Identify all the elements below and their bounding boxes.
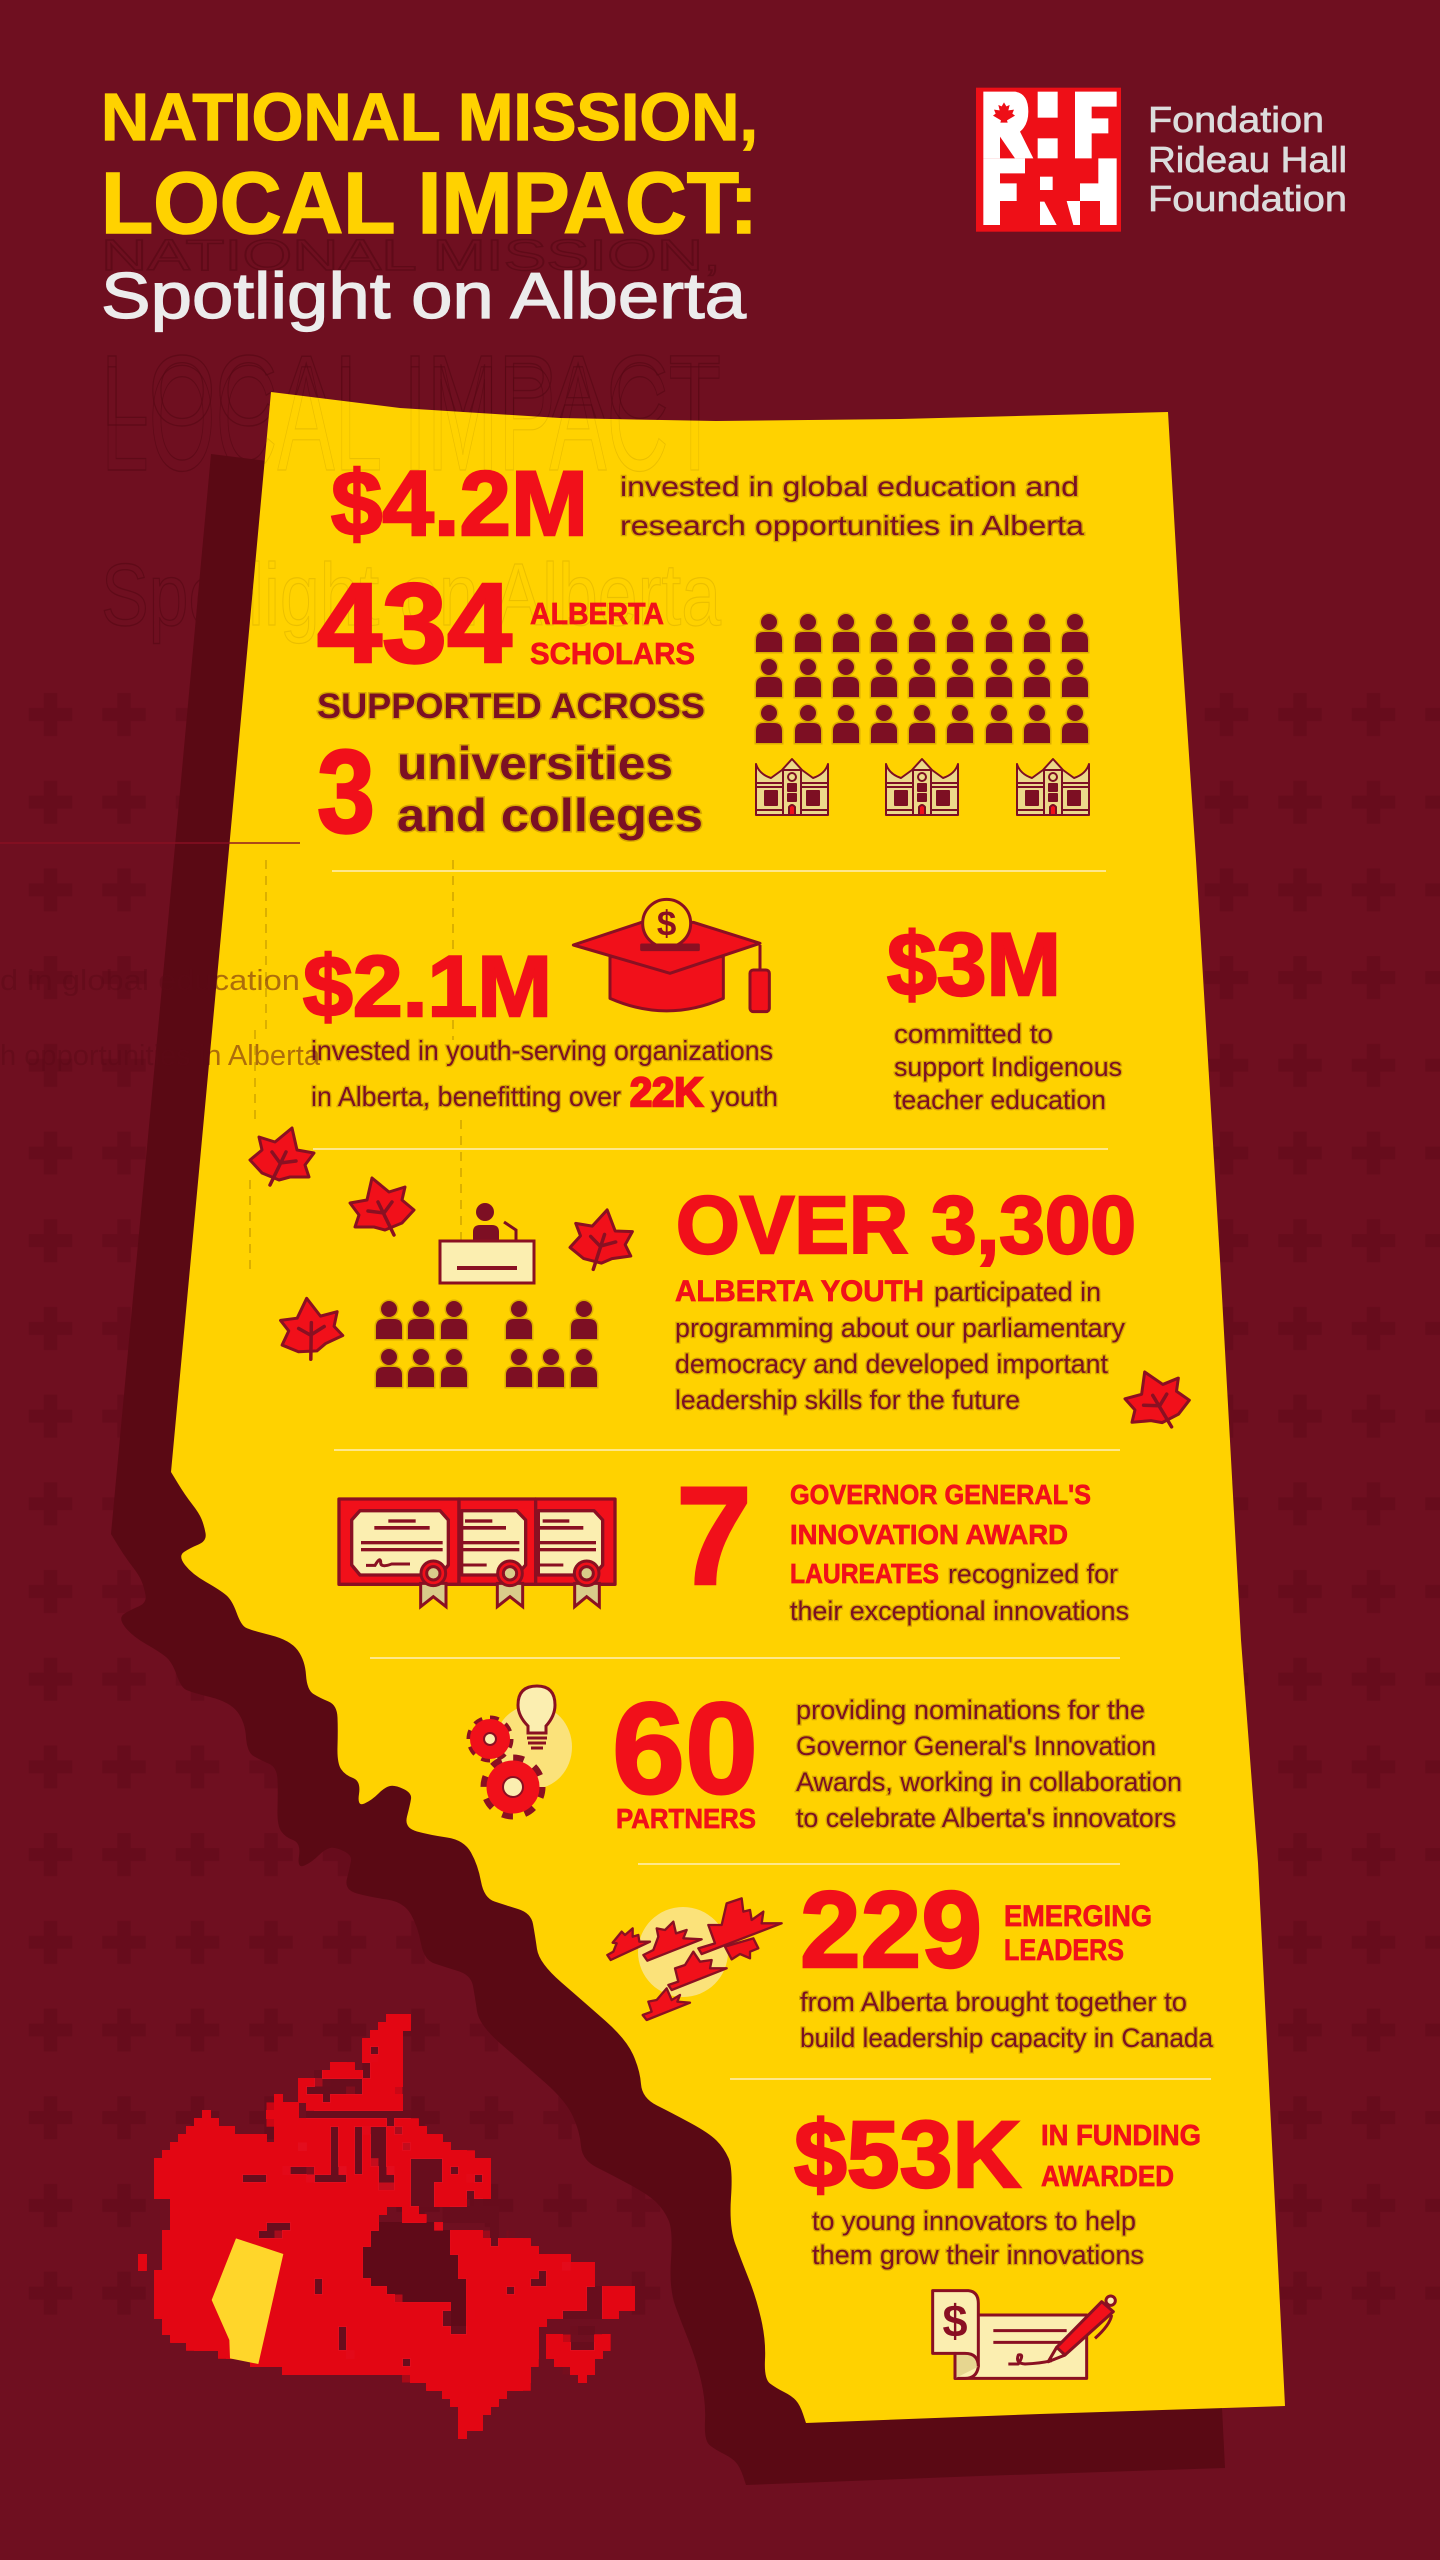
stat: 434 scholars: universities (397, 737, 673, 789)
logo (976, 88, 1347, 232)
logo wordmark: Rideau Hall (1148, 139, 1347, 180)
stat: 7 laureates: recognized for (948, 1559, 1118, 1589)
ghost artefact text on map: d in global education (0, 965, 300, 997)
stat: 7 laureates: LAUREATES (790, 1558, 939, 1589)
stat: $2.1M: 22K (630, 1069, 703, 1115)
title (101, 80, 758, 332)
stat: $53K: them grow their innovations (812, 2240, 1144, 2270)
stat: over 3,300: leadership skills for the future (675, 1385, 1020, 1415)
stat: $4.2M: invested in global education and (620, 471, 1079, 502)
stat: $53K: AWARDED (1041, 2161, 1174, 2193)
stat: 434 scholars: SCHOLARS (530, 636, 695, 671)
icon: graduation cap with coin: $ (657, 905, 676, 944)
logo wordmark (1148, 99, 1347, 219)
stat: 7 laureates: their exceptional innovations (790, 1596, 1129, 1626)
icon: cheque and pen (933, 2291, 1115, 2378)
logo wordmark: Foundation (1148, 178, 1347, 219)
Canada landmass and waters (137, 2017, 632, 2438)
stat: 229 emerging leaders: build leadership capacity in Canada (800, 2023, 1213, 2053)
stat: over 3,300: OVER 3,300 (676, 1180, 1136, 1271)
background plus pattern (0, 671, 1440, 2341)
icon: podium and speaker (440, 1203, 534, 1283)
stat: 7 laureates: INNOVATION AWARD (790, 1519, 1068, 1550)
stat: over 3,300: democracy and developed important (675, 1349, 1108, 1379)
Alberta map panel (171, 392, 1285, 2423)
icon: university buildings (756, 759, 1089, 815)
stat: 434 scholars: 3 (317, 726, 375, 858)
stat: 60 partners: Awards, working in collaboration (796, 1767, 1182, 1797)
title: Spotlight on Alberta (101, 259, 747, 332)
icon: rising maple leaves (607, 1898, 782, 2020)
stat: 60 partners: 60 (612, 1675, 758, 1821)
stat: over 3,300 (675, 1180, 1136, 1415)
faint artefacts on the map: LOCAL IMPACT (101, 334, 721, 502)
stat: $2.1M: youth (711, 1081, 778, 1112)
icon: lightbulb and gears (471, 1686, 572, 1814)
ghost artefact text: LOCAL IMPACT (101, 335, 721, 447)
icon: people grid (756, 614, 1088, 743)
stat: $2.1M (303, 939, 778, 1115)
icon: graduation cap with coin (573, 899, 769, 1012)
stat: 60 partners: PARTNERS (616, 1803, 756, 1834)
stat: $3M (887, 914, 1122, 1115)
stat: $53K: $53K (794, 2102, 1021, 2208)
Alberta shadow (111, 454, 1225, 2485)
ghost artefact text: Spotlight on Alberta (101, 545, 721, 644)
stat: $53K: to young innovators to help (812, 2206, 1136, 2236)
stat: 60 partners (612, 1675, 1182, 1834)
Alberta highlight (212, 2238, 283, 2364)
stat: over 3,300: ALBERTA YOUTH (675, 1275, 924, 1308)
stat: $53K (794, 2102, 1201, 2270)
stat: $3M: committed to (894, 1019, 1053, 1049)
title: LOCAL IMPACT: (101, 155, 758, 252)
stat: $53K: IN FUNDING (1041, 2120, 1201, 2152)
stat: over 3,300: programming about our parliamentary (675, 1313, 1125, 1343)
logo wordmark: Fondation (1148, 99, 1324, 140)
icon: maple leaves (250, 1128, 1191, 1431)
stat: 7 laureates: 7 (676, 1457, 752, 1614)
ghost artefact text on map (0, 965, 321, 1072)
stat: 434 scholars: ALBERTA (530, 596, 664, 631)
stat: 434 scholars: SUPPORTED ACROSS (317, 687, 705, 726)
stat: $3M: support Indigenous (894, 1052, 1122, 1082)
logo mark (976, 88, 1121, 232)
artefact streak (0, 842, 300, 844)
ghost artefact text (101, 231, 721, 644)
stat: 60 partners: to celebrate Alberta's innovators (796, 1803, 1176, 1833)
stat: 434 scholars (317, 560, 705, 858)
ghost artefact text on map: h opportunities in Alberta (0, 1040, 321, 1072)
stat: 60 partners: Governor General's Innovation (796, 1731, 1156, 1761)
icon: cheque and pen: $ (942, 2296, 968, 2347)
stat: $2.1M: invested in youth-serving organizations (311, 1035, 773, 1066)
stat: 229 emerging leaders: from Alberta brought together to (800, 1987, 1187, 2017)
faint artefacts on the map: Spotlight on Alberta (101, 545, 721, 644)
stat: over 3,300: participated in (934, 1277, 1101, 1307)
ghost artefact text: LOCAL IMPACT (101, 334, 721, 502)
title: NATIONAL MISSION, (101, 80, 758, 155)
stat: 229 emerging leaders: LEADERS (1004, 1934, 1124, 1967)
stat: 60 partners: providing nominations for the (796, 1695, 1145, 1725)
stat: $2.1M: in Alberta, benefitting over (311, 1081, 621, 1112)
stat: 7 laureates: GOVERNOR GENERAL'S (790, 1479, 1091, 1510)
stat: 7 laureates (676, 1457, 1129, 1626)
stat: $3M: $3M (887, 914, 1061, 1014)
stat: 229 emerging leaders (800, 1869, 1213, 2053)
ghost artefact text: NATIONAL MISSION, (101, 231, 721, 280)
stat: 229 emerging leaders: EMERGING (1004, 1900, 1152, 1933)
stat: 229 emerging leaders: 229 (800, 1869, 982, 1991)
stat: $4.2M: $4.2M (331, 453, 588, 555)
icon: audience (376, 1301, 597, 1387)
stat: 434 scholars: 434 (317, 560, 512, 686)
map of Canada (137, 2017, 632, 2438)
stat: $4.2M (331, 453, 1084, 555)
stat: $3M: teacher education (894, 1085, 1106, 1115)
stat: 434 scholars: and colleges (397, 789, 703, 841)
stat: $2.1M: $2.1M (303, 939, 552, 1035)
icon: certificates (339, 1499, 615, 1607)
stat: $4.2M: research opportunities in Alberta (620, 510, 1084, 541)
faint artefacts on the map (101, 334, 721, 1270)
